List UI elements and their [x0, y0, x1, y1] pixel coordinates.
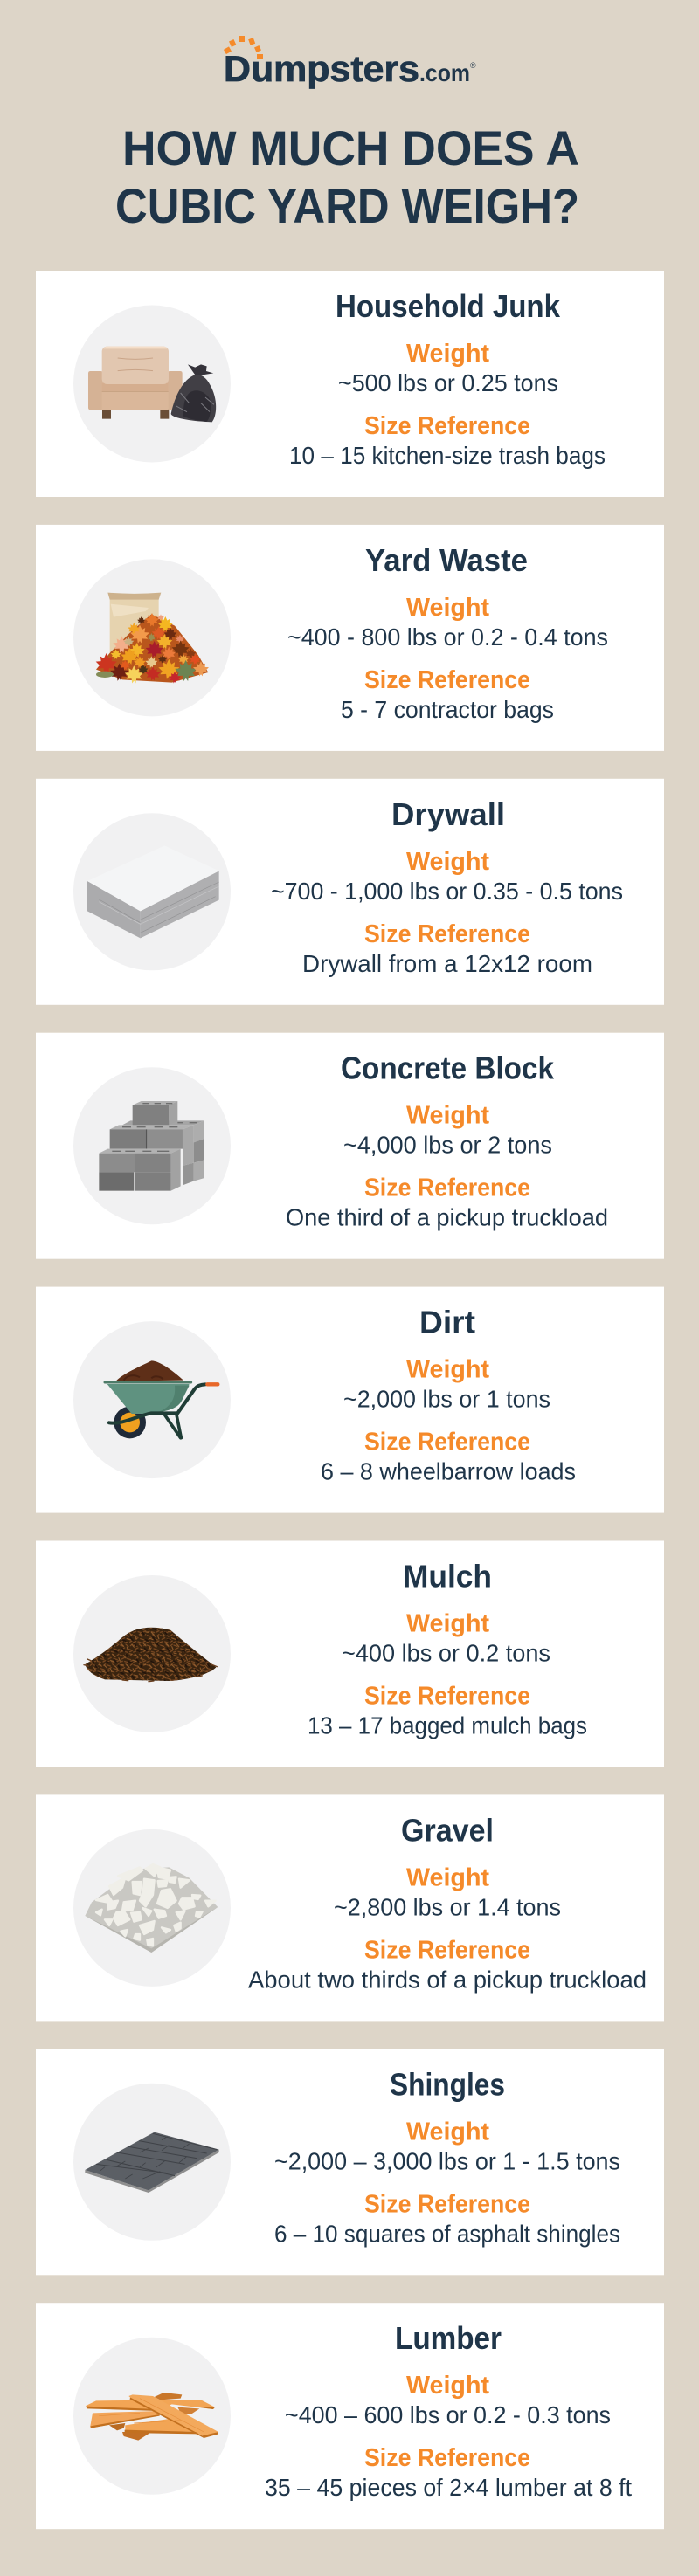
icon circle [73, 2338, 231, 2495]
weight value: ~2,800 lbs or 1.4 tons [334, 1893, 561, 1920]
icon circle [73, 559, 231, 716]
icon circle [73, 1321, 231, 1478]
weight value: ~2,000 lbs or 1 tons [343, 1386, 550, 1413]
size reference value: One third of a pickup truckload [286, 1204, 608, 1231]
logo domain suffix: .com [419, 59, 470, 86]
weight value: ~700 - 1,000 lbs or 0.35 - 0.5 tons [271, 878, 623, 905]
card background [36, 1287, 664, 1513]
panel: shingles [36, 2049, 664, 2275]
size reference label: Size Reference [364, 412, 530, 440]
size reference value: 13 – 17 bagged mulch bags [308, 1712, 587, 1739]
logo wordmark: Dumpsters [224, 48, 419, 89]
title line 2: CUBIC YARD WEIGH? [115, 178, 579, 233]
icon: gravel patch [85, 1864, 218, 1953]
weight label: Weight [406, 848, 489, 876]
card background [36, 1540, 664, 1767]
weight label: Weight [406, 594, 489, 622]
card background [36, 779, 664, 1005]
icon circle [73, 2084, 231, 2241]
size reference value: 6 – 10 squares of asphalt shingles [274, 2220, 620, 2247]
weight value: ~4,000 lbs or 2 tons [343, 1132, 552, 1159]
icon: leaf pile and paper bag [96, 593, 209, 684]
panel: gravel [36, 1794, 664, 2021]
weight value: ~400 lbs or 0.2 tons [342, 1640, 550, 1666]
size reference value: 10 – 15 kitchen-size trash bags [289, 442, 606, 469]
heading: Drywall [391, 796, 505, 832]
panel: mulch [36, 1540, 664, 1767]
size reference label: Size Reference [364, 2190, 530, 2218]
heading: Yard Waste [365, 542, 528, 578]
icon: concrete blocks [99, 1101, 204, 1191]
card background [36, 1794, 664, 2021]
size reference label: Size Reference [364, 1429, 530, 1457]
icon: wheelbarrow with dirt [105, 1360, 218, 1438]
panel: concrete block [36, 1033, 664, 1259]
heading: Concrete Block [341, 1050, 555, 1086]
weight label: Weight [406, 2372, 489, 2400]
size reference value: 6 – 8 wheelbarrow loads [321, 1458, 576, 1485]
panel: lumber [36, 2303, 664, 2529]
weight label: Weight [406, 340, 489, 368]
title [115, 121, 579, 233]
heading: Lumber [395, 2320, 502, 2356]
size reference value: Drywall from a 12x12 room [302, 950, 592, 977]
icon: drywall stack [87, 845, 219, 938]
weight value: ~400 – 600 lbs or 0.2 - 0.3 tons [285, 2401, 611, 2428]
heading: Household Junk [336, 288, 561, 324]
heading: Shingles [390, 2066, 505, 2102]
weight value: ~500 lbs or 0.25 tons [338, 369, 558, 396]
title line 1: HOW MUCH DOES A [122, 121, 579, 176]
weight label: Weight [406, 1356, 489, 1384]
card background [36, 525, 664, 751]
icon: asphalt shingles [85, 2132, 219, 2193]
weight label: Weight [406, 2118, 489, 2146]
size reference value: 35 – 45 pieces of 2×4 lumber at 8 ft [265, 2474, 632, 2501]
icon circle [73, 813, 231, 970]
size reference value: 5 - 7 contractor bags [341, 696, 554, 723]
icon: armchair and trash bag [88, 347, 216, 422]
panel: yard waste [36, 525, 664, 751]
panel: drywall [36, 779, 664, 1005]
size reference label: Size Reference [364, 666, 530, 694]
size reference label: Size Reference [364, 2444, 530, 2472]
card background [36, 1033, 664, 1259]
card background [36, 2303, 664, 2529]
card background [36, 2049, 664, 2275]
icon circle [73, 306, 231, 463]
weight value: ~400 - 800 lbs or 0.2 - 0.4 tons [287, 623, 608, 651]
size reference label: Size Reference [364, 920, 530, 948]
card background [36, 271, 664, 497]
logo registered mark: ® [470, 61, 476, 70]
panel: dirt [36, 1287, 664, 1513]
icon: lumber planks [86, 2393, 218, 2441]
size reference label: Size Reference [364, 1174, 530, 1202]
icon: mulch pile [84, 1628, 217, 1682]
logo: Dumpsters.com [224, 36, 476, 89]
icon circle [73, 1575, 231, 1732]
weight value: ~2,000 – 3,000 lbs or 1 - 1.5 tons [274, 2147, 620, 2174]
icon circle [73, 1829, 231, 1987]
size reference label: Size Reference [364, 1936, 530, 1964]
panel: household junk [36, 271, 664, 497]
weight label: Weight [406, 1863, 489, 1891]
icon: logo rays [224, 36, 263, 59]
weight label: Weight [406, 1610, 489, 1638]
heading: Dirt [419, 1305, 475, 1340]
heading: Mulch [403, 1558, 492, 1595]
weight label: Weight [406, 1102, 489, 1130]
size reference label: Size Reference [364, 1682, 530, 1710]
heading: Gravel [401, 1812, 494, 1848]
size reference value: About two thirds of a pickup truckload [248, 1966, 647, 1993]
icon circle [73, 1067, 231, 1224]
